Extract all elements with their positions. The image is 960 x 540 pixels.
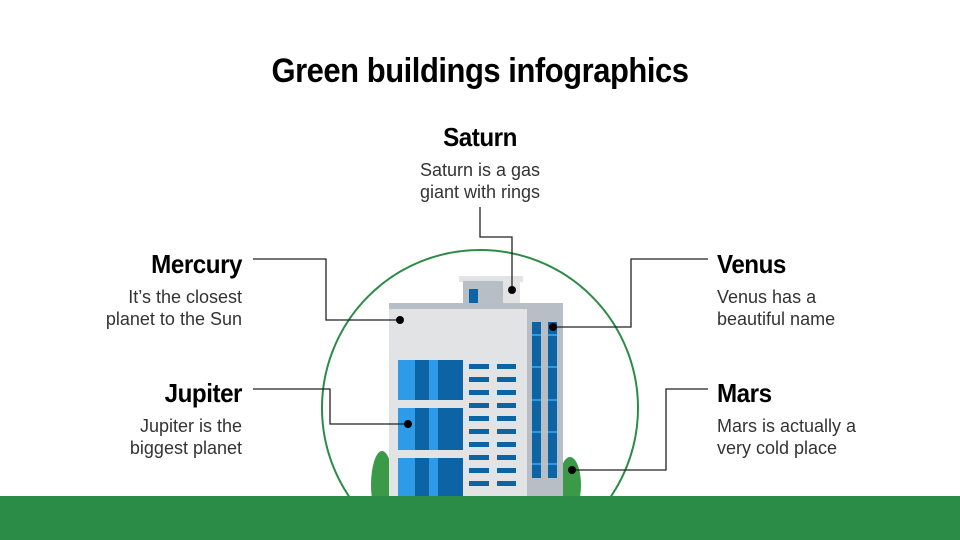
Jupiter text: Jupiter is the	[140, 416, 242, 436]
building	[389, 276, 563, 497]
Mercury text: It’s the closest	[128, 287, 242, 307]
Mars text: Mars is actually a	[717, 416, 856, 436]
ground	[0, 496, 960, 540]
Mercury text	[106, 249, 242, 329]
Saturn text	[420, 122, 540, 202]
dots	[396, 286, 576, 474]
green circle	[322, 250, 638, 540]
Mars text	[717, 378, 856, 458]
Jupiter text: biggest planet	[130, 438, 242, 458]
Jupiter text	[130, 378, 242, 458]
Mars text: very cold place	[717, 438, 837, 458]
Saturn text: Saturn is a gas	[420, 160, 540, 180]
title: Green buildings infographics	[271, 52, 689, 90]
Venus text	[717, 249, 835, 329]
Mercury text: planet to the Sun	[106, 309, 242, 329]
Mercury text: Mercury	[151, 249, 242, 279]
Venus text: Venus has a	[717, 287, 816, 307]
connector lines	[253, 207, 708, 470]
Venus text: beautiful name	[717, 309, 835, 329]
Mars text: Mars	[717, 378, 772, 408]
Jupiter text: Jupiter	[165, 378, 242, 408]
Saturn text: Saturn	[443, 122, 517, 152]
bushes	[371, 451, 581, 519]
Venus text: Venus	[717, 249, 786, 279]
Saturn text: giant with rings	[420, 182, 540, 202]
